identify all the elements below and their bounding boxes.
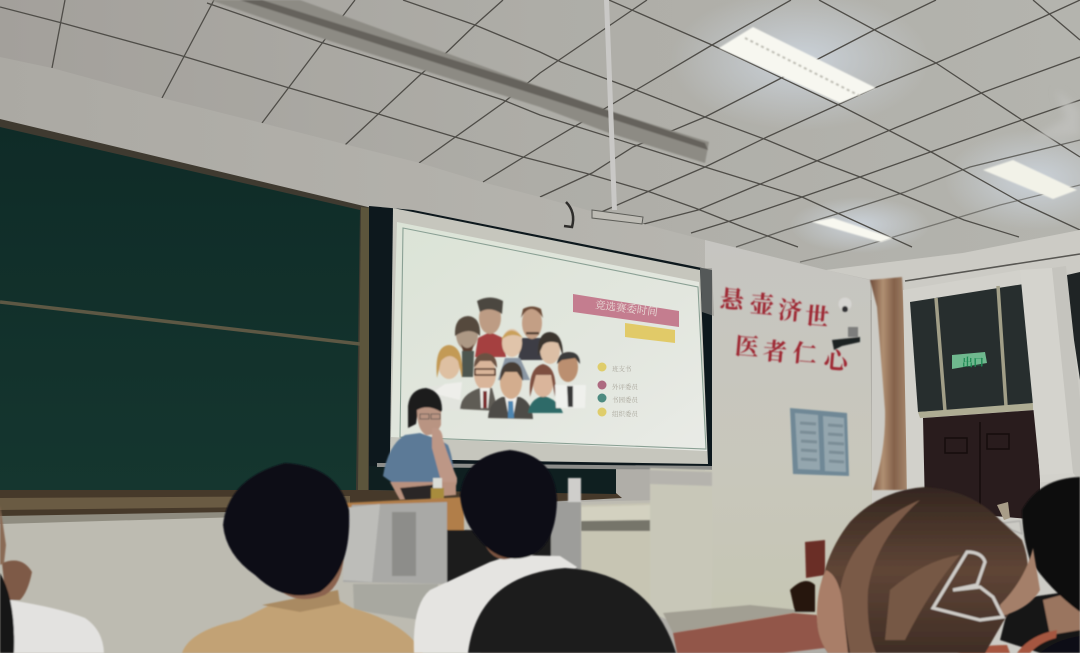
blackboard bbox=[0, 119, 622, 524]
slide: bullet list bbox=[598, 362, 638, 418]
wall slogan bbox=[719, 286, 852, 376]
slide: title banner bbox=[573, 294, 679, 327]
slide: bullet list: 书园委员 bbox=[612, 395, 638, 404]
upper wall bbox=[0, 57, 1080, 300]
slide: people illustration bbox=[427, 298, 586, 419]
wall slogan: 悬 bbox=[719, 286, 747, 315]
red box bbox=[805, 540, 825, 578]
exit sign: 出口 bbox=[962, 355, 984, 369]
wall slogan: 济 bbox=[777, 297, 803, 326]
podium bbox=[343, 478, 581, 620]
presenter bbox=[383, 388, 457, 502]
student white shirt bbox=[414, 450, 577, 653]
slide: bullet list: 外评委员 bbox=[612, 382, 638, 391]
lower left wall bbox=[0, 500, 660, 653]
projection screen bbox=[369, 206, 712, 468]
wall slogan: 仁 bbox=[792, 340, 818, 369]
water bottle bbox=[431, 478, 444, 502]
student right edge bbox=[957, 477, 1080, 653]
slide: yellow box bbox=[625, 323, 675, 343]
slide: title banner: 竞选赛委时间 bbox=[594, 298, 658, 319]
ceiling fan bbox=[1030, 90, 1080, 140]
lower wall details bbox=[581, 468, 825, 640]
screen support bar bbox=[377, 463, 712, 470]
security camera bbox=[832, 298, 860, 350]
wall slogan: 者 bbox=[762, 338, 788, 367]
wall slogan: 壶 bbox=[749, 291, 775, 320]
right wall bbox=[705, 240, 880, 640]
ceiling bbox=[0, 0, 1080, 300]
wall slogan: 世 bbox=[804, 303, 830, 332]
window and door bbox=[903, 268, 1075, 520]
student hair clip bbox=[817, 487, 1040, 653]
wall slogan: 心 bbox=[823, 347, 852, 376]
slide: bullet list: 班支书 bbox=[612, 364, 632, 373]
head foreground bbox=[468, 568, 676, 653]
curtain bbox=[870, 277, 907, 490]
slide: bullet list: 组织委员 bbox=[612, 409, 638, 418]
hair clip bbox=[933, 552, 1003, 620]
student left edge bbox=[0, 505, 104, 653]
window pillar bbox=[1020, 268, 1073, 475]
wall slogan: 医 bbox=[734, 333, 760, 362]
floor bbox=[663, 605, 817, 633]
audience bbox=[0, 450, 1080, 653]
projector hanger pole bbox=[564, 0, 643, 227]
notice board bbox=[790, 408, 849, 476]
ceiling lights bbox=[719, 27, 1077, 242]
student tan shirt bbox=[182, 463, 423, 653]
ceiling duct bbox=[210, 0, 709, 163]
exit sign bbox=[952, 352, 987, 369]
side wall edge bbox=[700, 268, 714, 316]
desk bbox=[673, 613, 833, 653]
